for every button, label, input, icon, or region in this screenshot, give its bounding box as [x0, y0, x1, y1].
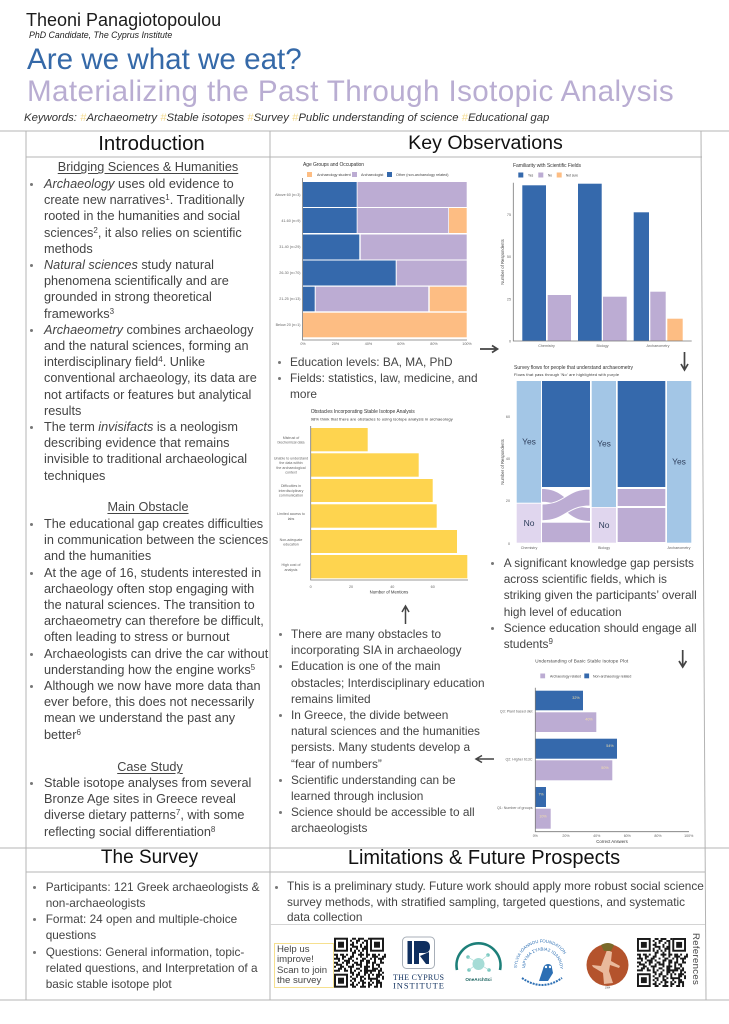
chart: obstacles incorporating stable isotope analysis: the archaeological [276, 466, 306, 470]
text: obstacles bullets: In Greece, the divide between [291, 708, 448, 722]
chart: familiarity with scientific fields: Familiarity with Scientific Fields [513, 163, 582, 169]
text: survey details: Questions: General information, topic- [46, 945, 244, 959]
text: help us improve: the survey [277, 975, 321, 986]
text: limitations [275, 879, 704, 924]
chart: age groups and occupation: Below 20 (n=1) [276, 323, 300, 327]
text: limitations: survey methods, with stratified sampling, targeted questions, and systematic [287, 895, 685, 909]
text: survey details [33, 880, 260, 991]
text: obstacles bullets: “fear of numbers” [291, 757, 382, 771]
chart: survey flows sankey: Survey flows for people that understand archaeometry [514, 365, 634, 371]
legend: yes no not sure: Yes [528, 174, 534, 178]
text: bridging sciences bullets: phenomena scientifically and are [44, 274, 229, 288]
chart: obstacles incorporating stable isotope analysis: labs [288, 517, 294, 521]
text: knowledge gap bullets [491, 556, 697, 651]
text: main obstacle bullets: better6 [44, 728, 81, 742]
chart: age groups and occupation: 0% [300, 342, 306, 346]
chart: survey flows sankey: Yes [522, 436, 536, 446]
text: case study bullet [30, 776, 251, 839]
text: limitations: This is a preliminary study. Future work should apply more robust social science [287, 879, 704, 893]
chart: survey flows sankey: 40 [506, 457, 510, 461]
logo: The Cyprus Institute: INSTITUTE [393, 980, 444, 990]
chart: understanding of basic stable isotope plot: Q3: Plant based diet [500, 710, 532, 714]
logo: Sylvia Ioannou Foundation [514, 940, 566, 986]
text: help us improve: Scan to join [277, 965, 327, 976]
legend: yes no not sure [518, 172, 578, 178]
chart: age groups and occupation: 21-25 (n=13) [279, 297, 300, 301]
text: knowledge gap bullets: A significant knowledge gap persists [504, 556, 694, 570]
logo: The Cyprus Institute [393, 937, 444, 990]
text: main obstacle bullets: The educational gap creates difficulties [44, 517, 263, 531]
chart: understanding of basic stable isotope plot: Correct Answers [596, 839, 628, 844]
chart: obstacles incorporating stable isotope analysis: Difficulties in [281, 484, 301, 488]
chart: understanding of basic stable isotope plot: Q2: Higher δ13C [506, 758, 533, 762]
chart: understanding of basic stable isotope plot: 7% [538, 792, 544, 796]
survey help box [274, 944, 334, 988]
chart: familiarity with scientific fields: Biology [596, 344, 609, 348]
chart: age groups and occupation: 40% [365, 342, 373, 346]
chart: understanding of basic stable isotope plot: 60% [624, 834, 632, 838]
text: bridging sciences bullets: frameworks3 [44, 307, 114, 321]
chart: obstacles incorporating stable isotope analysis: analysis [285, 568, 298, 572]
text: survey details: related questions, and Interpretation of a [46, 961, 258, 975]
text: knowledge gap bullets: striking given the participants’ overall [504, 588, 697, 602]
text: obstacles bullets: Science should be accessible to all [291, 805, 475, 819]
text: limitations: data collection [287, 910, 362, 924]
text: bridging sciences bullets: invisible to traditional archaeological [44, 452, 247, 466]
chart: obstacles incorporating stable isotope analysis: Obstacles Incorporating Stable Isotope Analysis [311, 409, 415, 415]
logo: OneArchSci: OneArchSci [465, 977, 492, 982]
chart: obstacles incorporating stable isotope analysis [274, 409, 468, 594]
text: education and fields bullets: Education levels: BA, MA, PhD [290, 355, 453, 369]
chart: obstacles incorporating stable isotope analysis: High cost of [282, 563, 300, 567]
chart: understanding of basic stable isotope plot: 10% [539, 814, 547, 818]
text: case study bullet: diverse dietary patterns7, with some [44, 808, 244, 822]
subheading: Case Study: Case Study [117, 760, 183, 774]
text: obstacles bullets: Scientific understanding can be [291, 773, 456, 787]
text: main obstacle bullets: At the age of 16, students interested in [44, 566, 261, 580]
text: education and fields bullets: Fields: statistics, law, medicine, and [290, 371, 478, 385]
chart: familiarity with scientific fields: Chemistry [538, 344, 555, 348]
text: bridging sciences bullets: The term invisifacts is a neologism [44, 420, 238, 434]
QR code: survey [334, 939, 386, 987]
text: bridging sciences bullets [30, 177, 257, 483]
logo: red circular emblem with figure [586, 943, 628, 990]
keywords: Keywords: #Archaeometry #Stable isotopes #Survey #Public understanding of science #Educational gap [24, 112, 549, 124]
text: main obstacle bullets: archaeometry can therefore be difficult, [44, 614, 264, 628]
text: survey details: basic stable isotope plot [46, 977, 172, 991]
text: bridging sciences bullets: create new narratives1. Traditionally [44, 193, 244, 207]
chart: obstacles incorporating stable isotope analysis: 98% think that there are obstacles to using isotope analysis in archaeology [311, 416, 453, 422]
chart: age groups and occupation: Above 60 (n=3) [275, 193, 300, 197]
chart: age groups and occupation: 80% [430, 342, 438, 346]
arrow: up to obstacles chart [402, 606, 409, 624]
text: help us improve: improve! [277, 954, 314, 965]
chart: familiarity with scientific fields: 50 [507, 255, 511, 259]
chart: understanding of basic stable isotope plot: 0% [533, 834, 539, 838]
text: bridging sciences bullets: methods [44, 242, 93, 256]
chart: familiarity with scientific fields: 25 [507, 298, 511, 302]
author name: Theoni Panagiotopoulou [26, 10, 221, 30]
logo: Sylvia Ioannou Foundation: SYLVIA IOANNOU FOUNDATION [514, 940, 566, 968]
chart: understanding of basic stable isotope plot: 32% [572, 696, 580, 700]
chart: survey flows sankey: Biology [598, 546, 610, 550]
chart: survey flows sankey: 20 [506, 499, 510, 503]
text: obstacles bullets: persists. Many students develop a [291, 740, 470, 754]
subtitle: Materializing the Past Through Isotopic Analysis [27, 75, 674, 108]
chart: obstacles incorporating stable isotope analysis: context [285, 470, 297, 474]
text: main obstacle bullets: Archaeologists can drive the car without [44, 647, 268, 661]
legend: archaeology related and non-archaeology related [540, 674, 631, 678]
text: bridging sciences bullets: results [44, 404, 81, 418]
subheading: Bridging Sciences & Humanities: Bridging Sciences & Humanities [58, 160, 238, 174]
text: obstacles bullets: remains limited [291, 692, 371, 706]
text: bridging sciences bullets: Archaeometry combines archaeology [44, 323, 253, 337]
text: knowledge gap bullets: across scientific fields, which is [504, 572, 667, 586]
logo: OneArchSci [457, 943, 500, 982]
text: bridging sciences bullets: not artifacts or features but analytical [44, 388, 251, 402]
author affiliation: PhD Candidate, The Cyprus Institute [29, 30, 172, 40]
chart: obstacles incorporating stable isotope analysis: Non-adequate [280, 538, 302, 542]
arrow: right to familiarity chart [480, 346, 498, 352]
legend: occupation [307, 172, 448, 177]
text: knowledge gap bullets: high level of education [504, 605, 622, 619]
chart: understanding of basic stable isotope plot: 40% [593, 834, 601, 838]
text: knowledge gap bullets: students9 [504, 637, 553, 651]
chart: survey flows sankey: 0 [508, 542, 510, 546]
text: education and fields bullets: more [290, 387, 317, 401]
chart: survey flows sankey: Yes [672, 456, 686, 466]
text: main obstacle bullets: ever before, this does not necessarily [44, 695, 254, 709]
QR code: references [637, 939, 688, 986]
text: case study bullet: Bronze Age sites in Greece reveal [44, 792, 236, 806]
chart: survey flows sankey: Chemistry [521, 546, 537, 550]
text: survey details: non-archaeologists [46, 896, 145, 910]
text: obstacles bullets: Education is one of the main [291, 659, 440, 673]
chart: age groups and occupation: 31-40 (n=29) [279, 245, 300, 249]
text: survey details: Format: 24 open and multiple-choice [46, 912, 237, 926]
text: main obstacle bullets: archaeology often stop engaging with [44, 582, 254, 596]
chart: familiarity with scientific fields: 75 [507, 213, 511, 217]
chart: familiarity with scientific fields: Archaeometry [647, 344, 670, 348]
heading: Limitations & Future Prospects: Limitations & Future Prospects [348, 847, 620, 869]
chart: understanding of basic stable isotope plot: 100% [684, 834, 694, 838]
text: obstacles bullets: natural sciences and the humanities [291, 724, 480, 738]
text: main obstacle bullets: often leading to stress or burnout [44, 630, 230, 644]
chart: understanding of basic stable isotope plot [497, 658, 694, 844]
text: obstacles bullets: learned through inclusion [291, 789, 423, 803]
chart: age groups and occupation: 20% [332, 342, 340, 346]
text: bridging sciences bullets: describing evidence that remains [44, 436, 229, 450]
chart: age groups and occupation: 100% [462, 342, 472, 346]
text: bridging sciences bullets: grounded in strong theoretical [44, 290, 212, 304]
chart: age groups and occupation [275, 162, 472, 346]
chart: understanding of basic stable isotope plot: 80% [654, 834, 662, 838]
chart: understanding of basic stable isotope plot: 54% [606, 744, 614, 748]
legend: occupation: Archaeology student [317, 173, 351, 177]
text: bridging sciences bullets: interdisciplinary field4. Unlike [44, 355, 205, 369]
arrow: down to isotope plot [679, 650, 686, 667]
arrow: down to survey flows [681, 352, 688, 370]
chart: survey flows sankey: Number of Respondents [500, 439, 505, 485]
legend: yes no not sure: Not sure [566, 174, 578, 178]
chart: obstacles incorporating stable isotope analysis: Mistrust of [283, 436, 299, 440]
chart: obstacles incorporating stable isotope analysis: 20 [349, 585, 353, 589]
text: references rotated label: References [690, 933, 701, 985]
chart: survey flows sankey: Flows that pass through 'No' are highlighted with purple [514, 372, 619, 377]
logo: red circular emblem with figure: 1984 [605, 986, 611, 990]
chart: obstacles incorporating stable isotope analysis: the data within [279, 461, 303, 465]
text: bridging sciences bullets: and the natural sciences, forming an [44, 339, 249, 353]
text: help us improve: Help us [277, 944, 310, 955]
text: obstacles bullets: archaeologists [291, 821, 367, 835]
arrow: left from isotope plot [476, 756, 494, 762]
chart: survey flows sankey: Yes [597, 438, 611, 448]
chart: obstacles incorporating stable isotope analysis: 0 [310, 585, 312, 589]
chart: age groups and occupation: 41-60 (n=9) [281, 219, 300, 223]
logo: Sylvia Ioannou Foundation: ΙΔΡΥΜΑ ΣΥΛΒΙΑΣ ΙΩΑΝΝΟΥ [522, 948, 563, 969]
legend: occupation: Archaeologist [361, 173, 383, 177]
legend: archaeology related and non-archaeology related: Non-archaeology related [593, 674, 631, 678]
subheading: Main Obstacle: Main Obstacle [107, 500, 189, 514]
title: Are we what we eat? [27, 43, 302, 76]
text: main obstacle bullets: understanding how the engine works5 [44, 663, 255, 677]
heading: Key Observations: Key Observations [408, 132, 563, 154]
chart: obstacles incorporating stable isotope analysis: 60 [431, 585, 435, 589]
chart: survey flows sankey: 60 [506, 415, 510, 419]
heading: Introduction: Introduction [98, 133, 205, 155]
text: knowledge gap bullets: Science education should engage all [504, 621, 697, 635]
chart: obstacles incorporating stable isotope analysis: communication [279, 494, 303, 498]
text: bridging sciences bullets: sciences2, it also relies on scientific [44, 226, 242, 240]
chart: survey flows sankey: No [524, 518, 535, 528]
chart: age groups and occupation: 60% [397, 342, 405, 346]
legend: yes no not sure: No [548, 174, 552, 178]
chart: survey flows sankey: No [599, 520, 610, 530]
chart: survey flows sankey [500, 365, 691, 550]
text: bridging sciences bullets: Natural sciences study natural [44, 258, 214, 272]
text: main obstacle bullets: in communication between the sciences [44, 533, 268, 547]
text: bridging sciences bullets: rooted in the humanities and social [44, 209, 240, 223]
text: obstacles bullets: There are many obstacles to [291, 627, 441, 641]
heading: The Survey: The Survey [101, 847, 198, 868]
chart: obstacles incorporating stable isotope analysis: Limited access to [277, 512, 305, 516]
chart: familiarity with scientific fields: Number of Respondents [500, 239, 505, 285]
chart: survey flows sankey: Archaeometry [668, 546, 691, 550]
text: bridging sciences bullets: conventional archaeology, its data are [44, 371, 257, 385]
chart: obstacles incorporating stable isotope analysis: education [283, 542, 299, 546]
legend: archaeology related and non-archaeology related: Archaeology related [550, 674, 581, 678]
text: help us improve [277, 944, 327, 986]
text: obstacles bullets: incorporating SIA in archaeology [291, 643, 462, 657]
chart: understanding of basic stable isotope plot: 50% [601, 766, 609, 770]
text: survey details: questions [46, 928, 96, 942]
text: education and fields bullets [278, 355, 478, 401]
chart: understanding of basic stable isotope plot: Q1: Number of groups [497, 806, 533, 810]
text: case study bullet: Stable isotope analyses from several [44, 776, 251, 790]
chart: familiarity with scientific fields [500, 163, 692, 348]
chart: obstacles incorporating stable isotope analysis: biochemical data [278, 440, 304, 444]
text: survey details: Participants: 121 Greek archaeologists & [46, 880, 259, 894]
text: case study bullet: reflecting social differentiation8 [44, 825, 215, 839]
chart: age groups and occupation: Age Groups and Occupation [303, 162, 364, 168]
chart: obstacles incorporating stable isotope analysis: interdisciplinary [279, 489, 304, 493]
text: main obstacle bullets: Although we now have more data than [44, 679, 261, 693]
chart: understanding of basic stable isotope plot: Understanding of Basic Stable Isotope Plot [535, 658, 629, 664]
text: main obstacle bullets: and the humanities [44, 549, 151, 563]
chart: age groups and occupation: 26-30 (n=70) [279, 271, 300, 275]
chart: obstacles incorporating stable isotope analysis: Number of Mentions [370, 590, 408, 594]
text: main obstacle bullets [30, 517, 268, 742]
text: bridging sciences bullets: techniques [44, 469, 105, 483]
text: bridging sciences bullets: Archaeology uses old evidence to [44, 177, 234, 191]
chart: understanding of basic stable isotope plot: 40% [585, 718, 593, 722]
chart: obstacles incorporating stable isotope analysis: Unable to understand [274, 456, 308, 460]
text: obstacles bullets [279, 627, 485, 835]
logo: The Cyprus Institute: THE CYPRUS [393, 973, 444, 982]
chart: familiarity with scientific fields: 0 [509, 340, 511, 344]
chart: obstacles incorporating stable isotope analysis: 40 [390, 585, 394, 589]
text: main obstacle bullets: mean we understand the past any [44, 711, 235, 725]
text: main obstacle bullets: the natural sciences. The transition to [44, 598, 255, 612]
chart: understanding of basic stable isotope plot: 20% [562, 834, 570, 838]
text: obstacles bullets: obstacles; Interdisciplinary education [291, 676, 485, 690]
legend: occupation: Other (non-archaeology related) [396, 173, 448, 177]
